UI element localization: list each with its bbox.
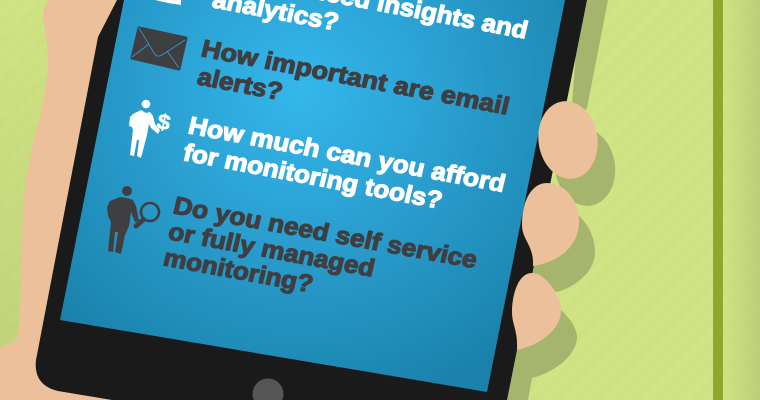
icon: envelope [132, 28, 186, 69]
question: email alerts: How important are email [199, 36, 512, 120]
question: monitoring budget: for monitoring tools? [181, 139, 445, 214]
icon: chart partially cropped [155, 0, 181, 5]
question: self service or managed: monitoring? [161, 244, 316, 298]
tablet screen [60, 0, 565, 392]
tablet body [36, 0, 587, 400]
question: email alerts: alerts? [195, 63, 285, 106]
question: self service or managed: or fully managed [166, 218, 377, 282]
question: self service or managed: Do you need self service [171, 192, 480, 274]
icon: businessman with dollar sign [129, 100, 173, 158]
fingers [512, 97, 603, 350]
vertical green bar [713, 0, 723, 400]
hand [0, 0, 130, 400]
home button [252, 378, 284, 400]
icon: businessman with magnifier [107, 186, 159, 254]
icon: businessman with dollar sign: $ [155, 109, 173, 135]
question: monitoring budget: How much can you afford [186, 112, 508, 198]
tablet and finger shadow [500, 0, 620, 400]
